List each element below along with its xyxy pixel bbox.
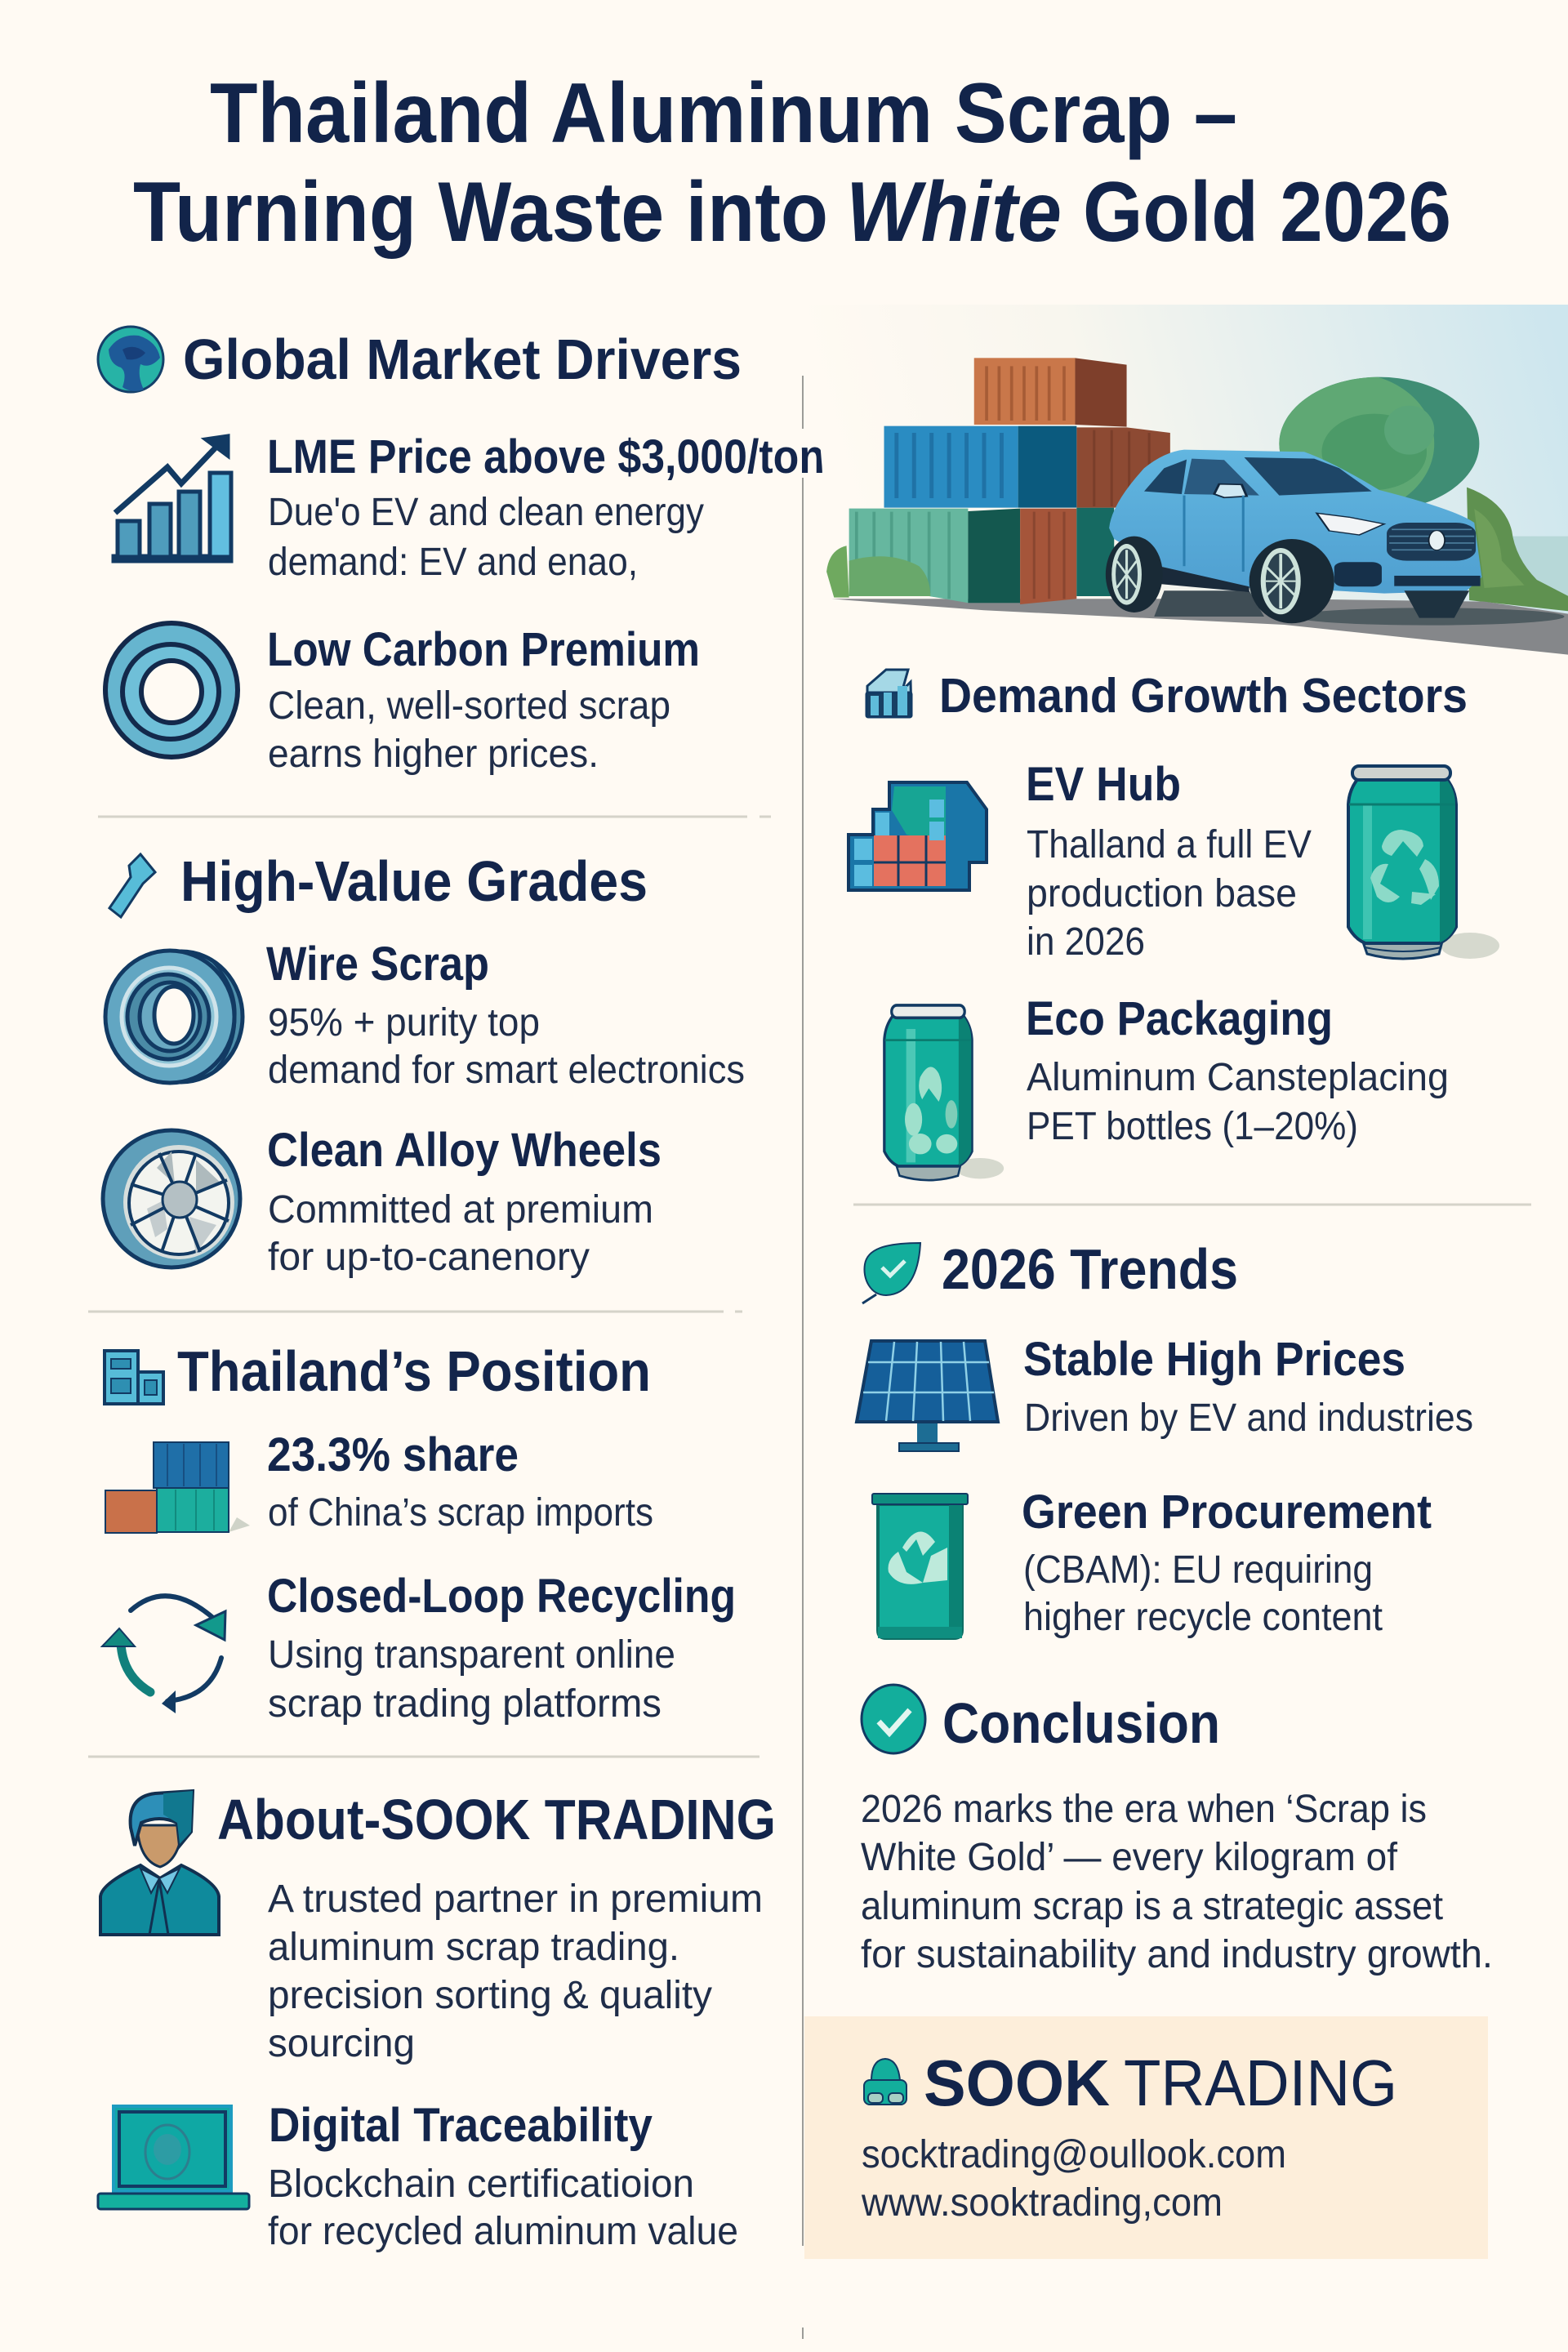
- panel: global market drivers: [98, 327, 825, 776]
- icon: alloy wheel: [103, 1130, 240, 1267]
- item: clean alloy wheels: [267, 1124, 662, 1279]
- item: green procurement: [1022, 1486, 1432, 1639]
- icon: EV hub: [849, 782, 987, 890]
- item: EV hub: [1026, 758, 1312, 964]
- icon: rising bar chart: [114, 436, 231, 561]
- icon: green recycling bin: [872, 1494, 968, 1638]
- item: stable high prices: [1023, 1333, 1473, 1440]
- heading: about sook trading: About-SOOK TRADING: [217, 1788, 776, 1851]
- item: low carbon premium: [267, 623, 700, 776]
- item: closed-loop recycling: Using transparent online: [268, 1633, 675, 1677]
- item: EV hub: Thalland a full EV: [1027, 823, 1312, 866]
- panel: thailand's position: [102, 1339, 736, 1726]
- icon: aluminum ring: [105, 623, 238, 757]
- item: digital traceability: for recycled aluminum value: [268, 2210, 738, 2253]
- item: clean alloy wheels: Clean Alloy Wheels: [267, 1124, 662, 1177]
- icon: scrap shard: [109, 854, 155, 917]
- heading: high-value grades: High-Value Grades: [180, 849, 648, 913]
- item: low carbon premium: Low Carbon Premium: [267, 623, 700, 676]
- item: clean alloy wheels: Committed at premium: [268, 1188, 653, 1232]
- item: green procurement: higher recycle content: [1023, 1596, 1383, 1639]
- icon: globe: [98, 327, 163, 392]
- item: 23.3% share: [267, 1428, 653, 1535]
- icon: laptop: [98, 2106, 249, 2209]
- contact details: socktrading@oullook.com: [862, 2133, 1286, 2176]
- item: 23.3% share: 23.3% share: [267, 1428, 519, 1481]
- heading: global market drivers: Global Market Drivers: [183, 327, 742, 391]
- icon: person: [100, 1791, 219, 1935]
- brand name: SOOK: [924, 2047, 1110, 2119]
- item: clean alloy wheels: for up-to-canenory: [268, 1236, 590, 1279]
- tree: [1264, 373, 1568, 611]
- icon: factory growth: [866, 670, 911, 717]
- item: wire scrap: [266, 938, 745, 1092]
- illustration: containers and electric car: [808, 305, 1568, 655]
- item: closed-loop recycling: Closed-Loop Recycling: [267, 1570, 736, 1623]
- panel: high-value grades: [103, 849, 745, 1279]
- text block: about: A trusted partner in premium: [268, 1878, 763, 1921]
- item: wire scrap: 95% + purity top: [268, 1001, 540, 1045]
- title: Thailand Aluminum Scrap –: [210, 66, 1237, 161]
- item: closed-loop recycling: [267, 1570, 736, 1726]
- item: stable high prices: Driven by EV and industries: [1024, 1396, 1473, 1440]
- sky background: [808, 305, 1568, 621]
- item: low carbon premium: Clean, well-sorted scrap: [268, 684, 670, 728]
- title: Gold 2026: [1083, 165, 1451, 260]
- contact details: www.sooktrading,com: [861, 2181, 1223, 2225]
- icon: solar panel: [857, 1341, 998, 1451]
- item: digital traceability: Digital Traceability: [269, 2099, 653, 2152]
- text block: conclusion: aluminum scrap is a strategic asset: [861, 1885, 1443, 1928]
- road: [831, 599, 1568, 655]
- item: low carbon premium: earns higher prices.: [268, 733, 599, 776]
- item: 23.3% share: of China’s scrap imports: [268, 1491, 653, 1535]
- item: LME price: demand: EV and enao,: [268, 541, 638, 584]
- panel: demand growth sectors: [849, 669, 1499, 1180]
- text block: about: [268, 1878, 763, 2065]
- item: digital traceability: [268, 2099, 738, 2253]
- item: eco packaging: [1026, 992, 1449, 1148]
- panel: conclusion: [861, 1685, 1493, 1976]
- icon: stacked containers: [105, 1442, 250, 1533]
- text block: conclusion: [861, 1788, 1493, 1976]
- item: LME price: [267, 430, 825, 584]
- icon: wire coil: [105, 951, 243, 1083]
- contact details: [861, 2133, 1286, 2225]
- item: digital traceability: Blockchain certificatioion: [268, 2163, 694, 2206]
- text block: about: precision sorting & quality: [268, 1974, 712, 2017]
- icon: buildings: [105, 1351, 163, 1404]
- icon: closed loop arrows: [102, 1596, 225, 1713]
- heading: thailand's position: Thailand’s Position: [177, 1339, 651, 1403]
- item: LME price: Due'o EV and clean energy: [268, 491, 704, 534]
- text block: conclusion: for sustainability and industry growth.: [861, 1933, 1493, 1976]
- item: closed-loop recycling: scrap trading platforms: [268, 1682, 662, 1726]
- sea: [1504, 537, 1568, 599]
- item: eco packaging: Eco Packaging: [1026, 992, 1333, 1045]
- title: White: [846, 165, 1062, 260]
- brand name: [924, 2047, 1397, 2119]
- panel: 2026 trends: [857, 1237, 1473, 1639]
- heading: conclusion: Conclusion: [942, 1691, 1220, 1755]
- item: eco packaging: PET bottles (1–20%): [1027, 1105, 1358, 1148]
- heading: demand growth sectors: Demand Growth Sectors: [939, 669, 1468, 723]
- icon: recycling can two: [884, 1005, 1004, 1180]
- text block: conclusion: 2026 marks the era when ‘Scrap is: [861, 1788, 1427, 1831]
- item: LME price: LME Price above $3,000/ton: [267, 430, 825, 483]
- item: wire scrap: Wire Scrap: [266, 938, 489, 991]
- item: EV hub: production base: [1027, 872, 1297, 915]
- text block: conclusion: White Gold’ — every kilogram of: [861, 1836, 1398, 1879]
- item: stable high prices: Stable High Prices: [1023, 1333, 1405, 1386]
- car: [1106, 450, 1481, 623]
- item: green procurement: (CBAM): EU requiring: [1023, 1548, 1373, 1592]
- brand name: TRADING: [1124, 2047, 1397, 2119]
- item: wire scrap: demand for smart electronics: [268, 1049, 745, 1092]
- text block: about: aluminum scrap trading.: [268, 1926, 679, 1969]
- item: EV hub: in 2026: [1027, 920, 1145, 964]
- icon: check circle: [862, 1685, 925, 1753]
- heading: 2026 trends: 2026 Trends: [942, 1237, 1238, 1301]
- item: eco packaging: Aluminum Cansteplacing: [1027, 1056, 1449, 1099]
- item: EV hub: EV Hub: [1026, 758, 1181, 811]
- containers: [826, 358, 1170, 604]
- text block: about: sourcing: [268, 2022, 415, 2065]
- icon: leaf check: [862, 1243, 920, 1303]
- title: [133, 66, 1451, 260]
- icon: sook logo: [864, 2059, 906, 2105]
- panel: about sook trading: [98, 1788, 776, 2253]
- item: green procurement: Green Procurement: [1022, 1486, 1432, 1539]
- panel: contact box: [804, 2016, 1488, 2259]
- title: Turning Waste into: [133, 165, 828, 260]
- icon: recycling can: [1348, 766, 1499, 959]
